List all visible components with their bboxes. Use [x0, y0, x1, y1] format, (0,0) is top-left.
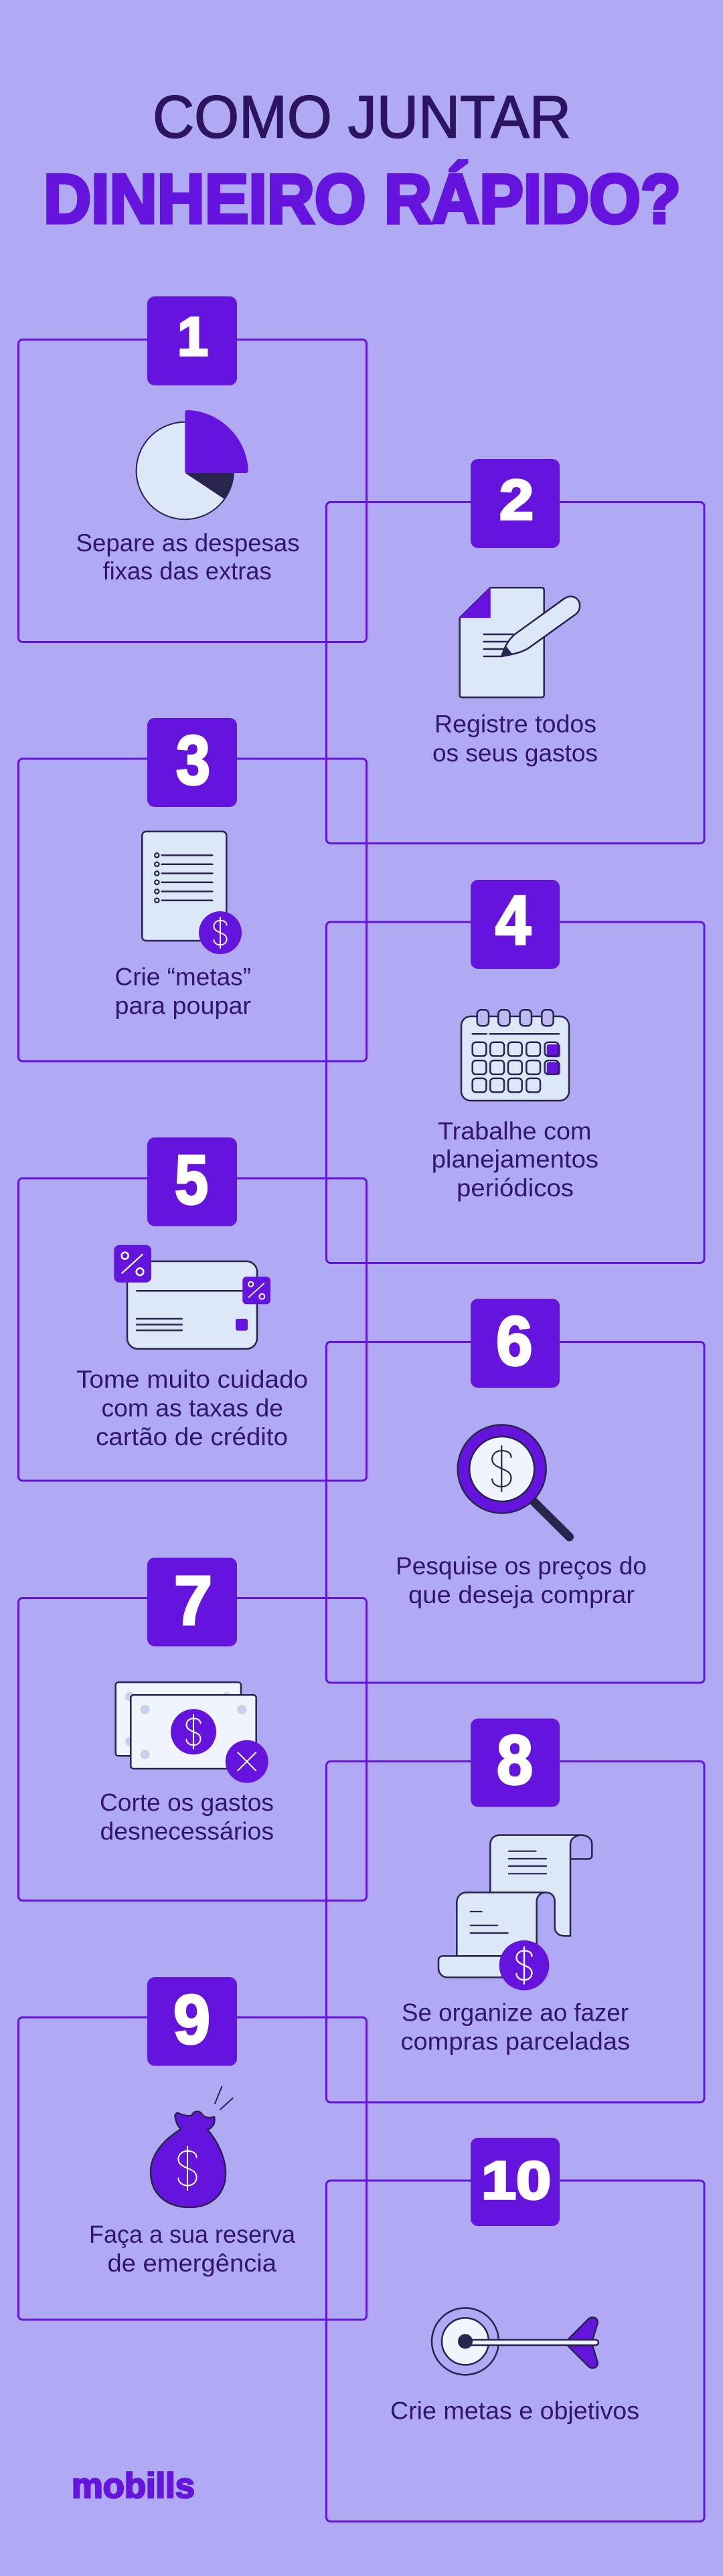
text: step 3: [115, 963, 251, 1020]
text: step 6: Pesquise os preços do: [396, 1552, 647, 1580]
number badge 3: [147, 718, 237, 807]
icon: target and arrow: [432, 2308, 598, 2375]
tag: small percent: [242, 1277, 270, 1304]
number badge 5: 5: [175, 1141, 208, 1219]
text: step 9: Faça a sua reserva: [89, 2221, 295, 2248]
text: step 3: Crie “metas”: [115, 963, 251, 990]
icon: receipts with coin: [438, 1835, 592, 1991]
number badge 3: 3: [176, 722, 210, 800]
text: step 6: que deseja comprar: [408, 1581, 635, 1608]
icon: credit card with percent tags: [114, 1245, 270, 1349]
text: step 5: com as taxas de: [102, 1394, 283, 1422]
text: step 5: cartão de crédito: [96, 1423, 288, 1451]
text: step 5: [76, 1366, 308, 1451]
text: step 3: para poupar: [115, 992, 251, 1020]
number badge 7: [147, 1558, 237, 1646]
number badge 8: 8: [497, 1722, 533, 1799]
panel: step 6: [327, 1299, 704, 1683]
number badge 1: 1: [177, 306, 208, 367]
number badge 9: [147, 1977, 237, 2066]
text: step 4: Trabalhe com: [438, 1117, 592, 1145]
text: step 1: Separe as despesas: [76, 529, 300, 557]
number badge 4: 4: [495, 882, 531, 959]
text: step 10: Crie metas e objetivos: [390, 2397, 639, 2425]
panel: step 5: [19, 1137, 367, 1481]
text: step 9: [89, 2221, 295, 2277]
number badge 8: [471, 1718, 560, 1807]
number badge 7: 7: [174, 1562, 212, 1640]
text: step 9: de emergência: [107, 2249, 276, 2277]
text: step 2: Registre todos: [434, 711, 596, 737]
text: step 4: [432, 1117, 598, 1202]
panel: step 3: [19, 718, 367, 1061]
text: step 1: fixas das extras: [103, 557, 272, 585]
number badge 2: 2: [499, 468, 534, 531]
number badge 9: 9: [173, 1981, 210, 2059]
number badge 1: [147, 296, 237, 385]
text: step 4: periódicos: [457, 1174, 574, 1202]
text: step 8: [400, 1999, 630, 2055]
number badge 6: [471, 1299, 560, 1388]
number badge 10: 10: [481, 2150, 551, 2210]
number badge 6: 6: [496, 1303, 533, 1380]
text: step 5: Tome muito cuidado: [76, 1366, 308, 1393]
icon: magnifying glass: [458, 1425, 569, 1537]
panel: step 10: [327, 2138, 704, 2521]
number badge 10: [471, 2138, 560, 2226]
icon: calendar: [461, 1010, 569, 1101]
logo: mobills: mobills: [72, 2466, 195, 2506]
tag: large percent: [114, 1245, 151, 1283]
panel: step 2: [327, 459, 704, 843]
number badge 4: [471, 880, 560, 969]
title: [44, 84, 681, 238]
icon: pie chart: [137, 410, 248, 519]
text: step 7: [100, 1789, 274, 1845]
text: step 8: compras parceladas: [400, 2027, 630, 2055]
title: COMO JUNTAR: [153, 84, 571, 151]
panel: step 1: [19, 296, 367, 642]
icon: banknotes with cross: [116, 1682, 268, 1783]
title: DINHEIRO RÁPIDO?: [44, 161, 681, 238]
text: step 2: [432, 711, 598, 767]
panel: step 7: [19, 1558, 367, 1900]
text: step 7: Corte os gastos: [100, 1789, 274, 1816]
number badge 2: [471, 459, 560, 548]
icon: checklist with coin: [142, 832, 242, 954]
panel: step 9: [19, 1977, 367, 2320]
panel: step 4: [327, 880, 704, 1263]
text: step 4: planejamentos: [432, 1145, 598, 1173]
text: step 7: desnecessários: [100, 1817, 274, 1845]
text: step 8: Se organize ao fazer: [402, 1999, 629, 2026]
text: step 1: [76, 529, 300, 585]
text: step 6: [396, 1552, 647, 1608]
panel: step 8: [327, 1718, 704, 2102]
icon: money bag: [151, 2087, 233, 2207]
number badge 5: [147, 1137, 237, 1226]
text: step 2: os seus gastos: [432, 739, 598, 767]
icon: document and pencil: [460, 587, 580, 697]
